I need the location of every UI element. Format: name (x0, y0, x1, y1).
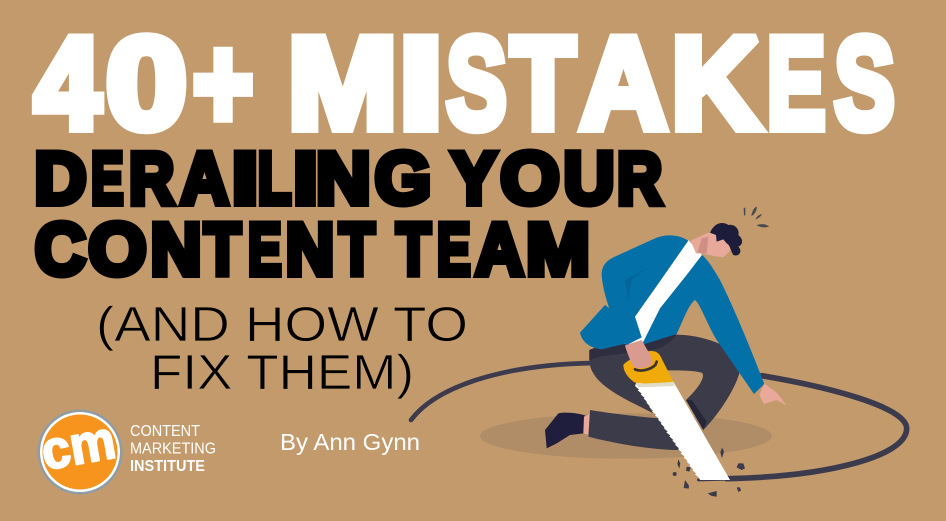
heading: Derailing your: I (232, 138, 258, 220)
byline: By Ann Gynn (280, 429, 420, 455)
heading: Derailing your: R (617, 138, 662, 220)
logo: Content Marketing Institute: cm (37, 410, 120, 482)
heading: Derailing your: O (500, 138, 560, 220)
heading: Derailing your: Y (452, 138, 496, 220)
title: 40+ Mistakes: A (580, 10, 667, 156)
dark circle on the floor (411, 363, 907, 480)
subtitle: And how to fix them: FIX THEM) (150, 346, 414, 400)
heading: Derailing your: R (129, 138, 174, 220)
right hand (759, 383, 787, 405)
title: 40+ Mistakes: I (399, 10, 443, 156)
hair (710, 223, 742, 256)
logo: Content Marketing Institute: INSTITUTE (130, 458, 205, 475)
logo: Content Marketing Institute (37, 410, 216, 494)
neck and face (691, 233, 731, 257)
title: 40+ Mistakes: S (834, 10, 895, 156)
floor shadow (480, 413, 772, 459)
title: 40+ Mistakes: 0 (106, 10, 187, 156)
heading: Derailing your: I (293, 138, 318, 220)
stress marks (744, 207, 769, 227)
heading: Derailing your: A (180, 138, 228, 220)
illustration: man sawing a circle around himself (411, 207, 907, 497)
left hand (625, 340, 652, 368)
heading: Content team: C (35, 210, 86, 290)
heading: Derailing your: L (258, 138, 291, 220)
trousers (588, 335, 741, 450)
shoe (545, 413, 586, 448)
heading: Derailing your: D (34, 138, 86, 220)
heading: Content team: N (286, 210, 334, 290)
heading: Content team: E (248, 210, 282, 290)
title: 40+ Mistakes: 4 (35, 10, 100, 156)
heading: Derailing your: U (564, 138, 614, 220)
title: 40+ Mistakes: + (193, 10, 253, 156)
heading: Content team: A (476, 210, 524, 290)
heading: Content team: T (339, 210, 375, 290)
heading: Content team: O (88, 210, 146, 290)
heading: Derailing your: G (375, 138, 431, 220)
heading: Content team: T (396, 210, 431, 290)
sawdust chips (673, 447, 745, 497)
heading: Content team: E (437, 210, 470, 290)
logo: Content Marketing Institute: MARKETING (130, 440, 216, 458)
ankle (583, 413, 591, 435)
subtitle: And how to fix them: (AND HOW TO (96, 298, 468, 352)
heading: Content team: M (526, 210, 590, 290)
subtitle: And how to fix them (96, 298, 468, 400)
heading: Derailing your: N (316, 138, 371, 220)
logo: Content Marketing Institute: CONTENT (130, 423, 200, 440)
title: 40+ Mistakes: T (511, 10, 575, 156)
heading: Content team: T (204, 210, 241, 290)
title: 40+ Mistakes: M (288, 10, 397, 156)
jacket (580, 235, 764, 394)
saw handle (623, 351, 673, 384)
title: 40+ Mistakes: S (446, 10, 507, 156)
saw blade (635, 382, 730, 480)
title: 40+ Mistakes: E (767, 10, 826, 156)
title: 40+ Mistakes: K (671, 10, 760, 156)
shirt (615, 240, 702, 344)
heading: Derailing your: E (91, 138, 123, 220)
heading: Content team: N (151, 210, 201, 290)
